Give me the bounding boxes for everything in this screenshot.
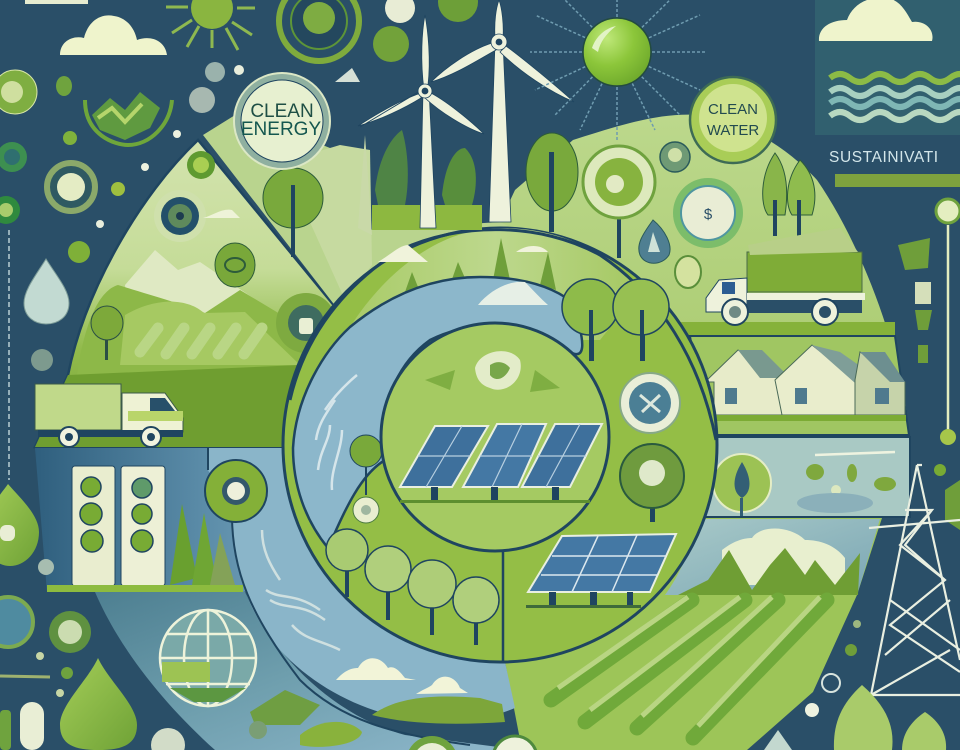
solar panels center — [400, 424, 602, 503]
ring glyph — [822, 674, 840, 692]
badge: clean energy — [234, 73, 330, 169]
badge: clean energy: CLEAN — [250, 101, 314, 122]
waves — [797, 74, 960, 120]
cloud top left — [60, 15, 167, 55]
solar panel lower — [526, 534, 676, 608]
arch trees — [405, 238, 556, 292]
tall spire and bushes — [358, 130, 482, 235]
cloud on ring — [478, 282, 548, 305]
divider lines — [502, 552, 504, 662]
bottom badges — [249, 721, 537, 750]
sun left with rays — [166, 0, 255, 50]
green hills — [372, 697, 505, 724]
panel: lower left globe — [95, 448, 522, 750]
icon: tree with node — [350, 435, 382, 523]
blue water ring — [293, 277, 582, 548]
wind turbines — [358, 0, 574, 228]
arch outline — [290, 230, 716, 440]
tree icon — [91, 306, 123, 360]
truck left — [35, 384, 183, 447]
transmission tower — [869, 465, 960, 695]
top white bar — [25, 0, 88, 4]
panel: upper middle turbine hills — [203, 112, 640, 330]
crop rows — [551, 600, 827, 738]
tree 1 — [326, 529, 368, 597]
turbine left — [358, 15, 484, 228]
row highlights — [558, 597, 820, 726]
icon: leaf emblem — [713, 454, 771, 516]
icon: recycle coin — [673, 178, 743, 248]
pine trees — [170, 504, 235, 585]
tree 4 — [453, 577, 499, 645]
shelf — [47, 585, 243, 592]
dashed line left — [8, 230, 10, 480]
badge: clean water: CLEAN — [708, 101, 758, 118]
hills — [678, 548, 860, 595]
icon: lock badge — [276, 293, 336, 353]
large green drop bottom — [60, 658, 137, 750]
green drop left — [0, 484, 39, 566]
inner circle — [381, 323, 609, 551]
house row — [705, 345, 906, 421]
arch cloud right — [516, 246, 548, 252]
badge: clean water — [690, 77, 776, 163]
bottom left capsules — [0, 702, 185, 750]
big tree beside clean energy — [263, 168, 323, 257]
badge: clean water: WATER — [707, 122, 759, 139]
foreground hill — [250, 690, 320, 725]
icon: tree badge — [620, 444, 684, 522]
icon: recycle coin: $ — [704, 206, 713, 223]
cloud top right — [819, 0, 933, 41]
lower grass field — [35, 365, 320, 447]
leaves bottom right — [764, 685, 946, 750]
icon: leaf coin — [675, 256, 701, 288]
icon: sun eye — [154, 190, 206, 242]
crop rows — [140, 328, 262, 354]
trees lower row — [326, 529, 499, 645]
left side medallions — [0, 70, 125, 263]
icon: blue water drop — [639, 220, 670, 263]
divider tick — [207, 448, 209, 470]
title fragment: sustainability: SUSTAINIVATI — [829, 149, 939, 166]
panel: houses — [690, 336, 909, 435]
left lower medallions — [0, 559, 91, 697]
panel: field with sky — [505, 518, 882, 750]
water waves — [262, 530, 340, 650]
green island — [300, 722, 362, 747]
tree 2 — [365, 546, 411, 620]
cloud — [722, 528, 845, 585]
twin round trees — [562, 279, 669, 361]
icon: small ring — [187, 151, 215, 179]
tree 3 — [408, 560, 456, 635]
water ripples — [316, 375, 357, 490]
truck right — [706, 228, 865, 325]
icon: globe — [160, 610, 256, 706]
icon: large target badge — [583, 146, 655, 258]
turbine right — [431, 0, 574, 222]
right side pin line — [936, 199, 960, 445]
arch cloud — [378, 245, 428, 262]
white and green medallions — [141, 0, 478, 171]
badge: clean energy: ENERGY — [241, 119, 321, 140]
icon: small round badge — [660, 142, 690, 172]
title fragment: sustainability — [829, 149, 960, 187]
tank left — [72, 466, 115, 586]
icon: green button — [205, 460, 267, 522]
tank right — [121, 466, 165, 586]
panel: central big circle — [283, 228, 717, 662]
ring emblem top — [279, 0, 359, 61]
tree oval — [526, 133, 578, 232]
light water drop — [24, 259, 69, 324]
right side small green icons — [845, 238, 960, 656]
icon: mountain blob — [215, 243, 255, 287]
river band — [208, 448, 515, 722]
panel: upper left landscape wedge — [35, 140, 350, 447]
panel: upper right truck hill — [500, 115, 910, 440]
small grey icon — [31, 349, 53, 371]
clouds — [336, 658, 468, 694]
icon: compass badge — [620, 373, 680, 433]
icon: top leaf emblem — [425, 351, 560, 392]
dotted ring medallion — [47, 163, 95, 211]
truck ground strip — [670, 322, 895, 335]
zigzag emblem — [85, 92, 172, 145]
mountains — [40, 250, 345, 447]
dotted upper right backdrop — [815, 0, 960, 135]
cloud — [203, 210, 240, 218]
twin leaf trees — [763, 153, 815, 236]
sun right with rays — [530, 0, 705, 140]
panel: tanks — [35, 448, 330, 592]
white dot — [805, 703, 819, 717]
sprinklers — [797, 452, 896, 513]
panel: sprinkler strip — [696, 437, 910, 517]
arch band — [350, 228, 640, 340]
